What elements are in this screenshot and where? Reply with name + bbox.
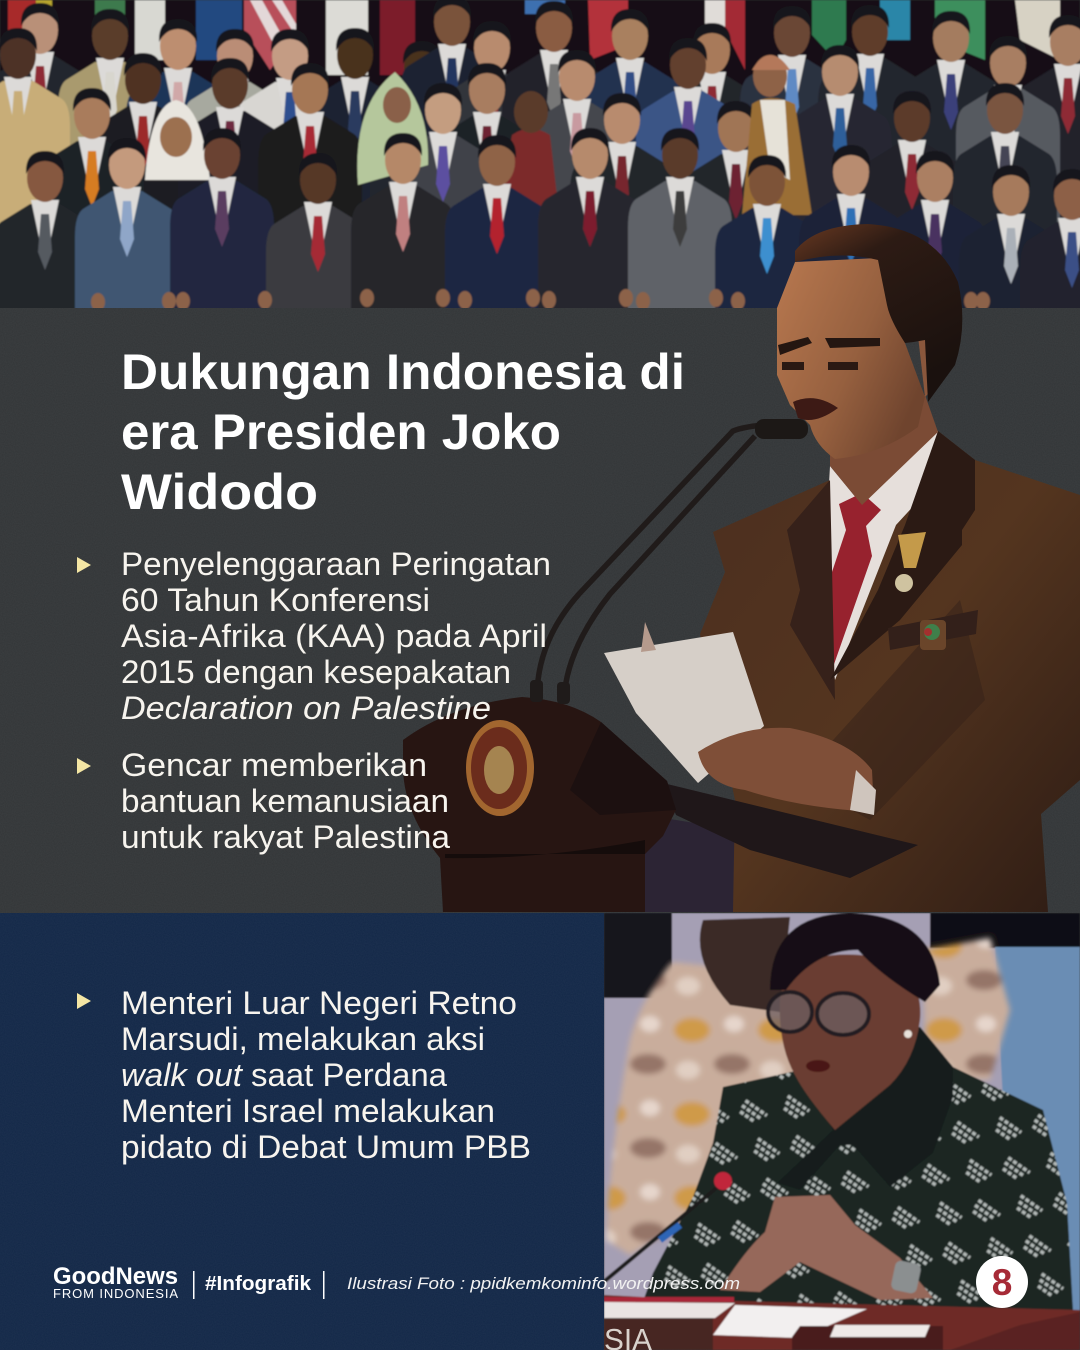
bullet: walk out at the UN: Marsudi, melakukan aksi xyxy=(121,1021,485,1057)
purple stage shadow under desk xyxy=(640,815,738,912)
bullet: walk out at the UN: Menteri Israel melakukan xyxy=(121,1093,495,1129)
bullet: humanitarian aid xyxy=(77,747,450,855)
earring xyxy=(904,1030,912,1038)
delegates' hands xyxy=(91,289,990,311)
blue seat xyxy=(995,947,1080,1310)
footer hashtag and separators xyxy=(193,1271,324,1299)
microphone xyxy=(600,1185,720,1285)
bullet: walk out at the UN: walk out saat Perdana xyxy=(121,1057,447,1093)
heading: Dukungan Indonesia di xyxy=(121,344,685,400)
bullet: KAA commemoration: Asia-Afrika (KAA) pada April xyxy=(121,618,547,654)
tie xyxy=(826,493,881,670)
delegates in traditional dress xyxy=(144,54,813,216)
microphones xyxy=(537,424,775,700)
front row delegates xyxy=(0,127,1080,308)
footer logo: GoodNews from Indonesia: GoodNews xyxy=(53,1263,178,1290)
collar xyxy=(777,1027,953,1190)
dark jacket fold xyxy=(815,600,985,820)
bullet: humanitarian aid: untuk rakyat Palestina xyxy=(121,819,450,855)
bullet: KAA commemoration: Declaration on Palestine xyxy=(121,690,491,726)
bullet: KAA commemoration xyxy=(77,546,551,726)
ear xyxy=(918,329,945,397)
eyes, brows and mouth xyxy=(778,337,880,355)
bullet: walk out at the UN: pidato di Debat Umum PBB xyxy=(121,1129,531,1165)
medal and pin xyxy=(898,532,926,568)
podium xyxy=(403,697,676,912)
back row delegates xyxy=(0,0,1080,217)
grain overlay xyxy=(0,308,1080,1350)
jacket xyxy=(644,1066,1074,1311)
bullet: walk out at the UN: Menteri Luar Negeri Retno xyxy=(121,985,517,1021)
hair xyxy=(770,913,940,1002)
photo: Retno Marsudi at UN debate xyxy=(600,913,1080,1350)
mouth xyxy=(806,1060,830,1072)
photo: Joko Widodo at the podium xyxy=(403,224,1080,912)
desk xyxy=(663,783,918,878)
heading xyxy=(121,344,685,520)
neighbour in floral dress xyxy=(606,938,1010,1255)
bullet: humanitarian aid: Gencar memberikan xyxy=(121,747,427,783)
page number badge: 8 xyxy=(992,1262,1012,1303)
middle row delegates xyxy=(0,27,1061,225)
face xyxy=(780,955,920,1130)
photo: group portrait of conference delegates xyxy=(0,0,1080,308)
lapels xyxy=(787,480,835,700)
face xyxy=(777,258,925,459)
suit xyxy=(700,431,1080,912)
bullet: humanitarian aid: bantuan kemanusiaan xyxy=(121,783,449,819)
pocket flap xyxy=(888,610,978,650)
neck xyxy=(830,395,938,505)
photo credit: Ilustrasi Foto : ppidkemkominfo.wordpress.com xyxy=(347,1274,740,1293)
podium emblem xyxy=(466,720,534,816)
panel: dark background xyxy=(0,308,1080,913)
footer logo: GoodNews from Indonesia: FROM INDONESIA xyxy=(53,1286,178,1301)
cuff xyxy=(850,770,876,815)
hair xyxy=(795,224,962,402)
microphone bases xyxy=(530,680,543,702)
bullet: KAA commemoration: Penyelenggaraan Peringatan xyxy=(121,546,551,582)
watch xyxy=(890,1260,922,1294)
bullet: KAA commemoration: 60 Tahun Konferensi xyxy=(121,582,430,618)
heading: era Presiden Joko xyxy=(121,404,561,460)
paper xyxy=(604,632,764,783)
shirt collar xyxy=(823,431,942,680)
glasses xyxy=(768,992,869,1035)
bullet: KAA commemoration: 2015 dengan kesepakatan xyxy=(121,654,511,690)
hand xyxy=(698,728,874,812)
footer hashtag and separators: #Infografik xyxy=(205,1273,312,1295)
panel: blue background xyxy=(0,913,604,1350)
bullet: walk out at the UN xyxy=(77,985,531,1165)
table xyxy=(604,1295,1080,1350)
hands xyxy=(720,1195,933,1300)
page number badge xyxy=(976,1256,1028,1308)
flags behind delegates xyxy=(8,0,1060,75)
heading: Widodo xyxy=(121,464,318,520)
